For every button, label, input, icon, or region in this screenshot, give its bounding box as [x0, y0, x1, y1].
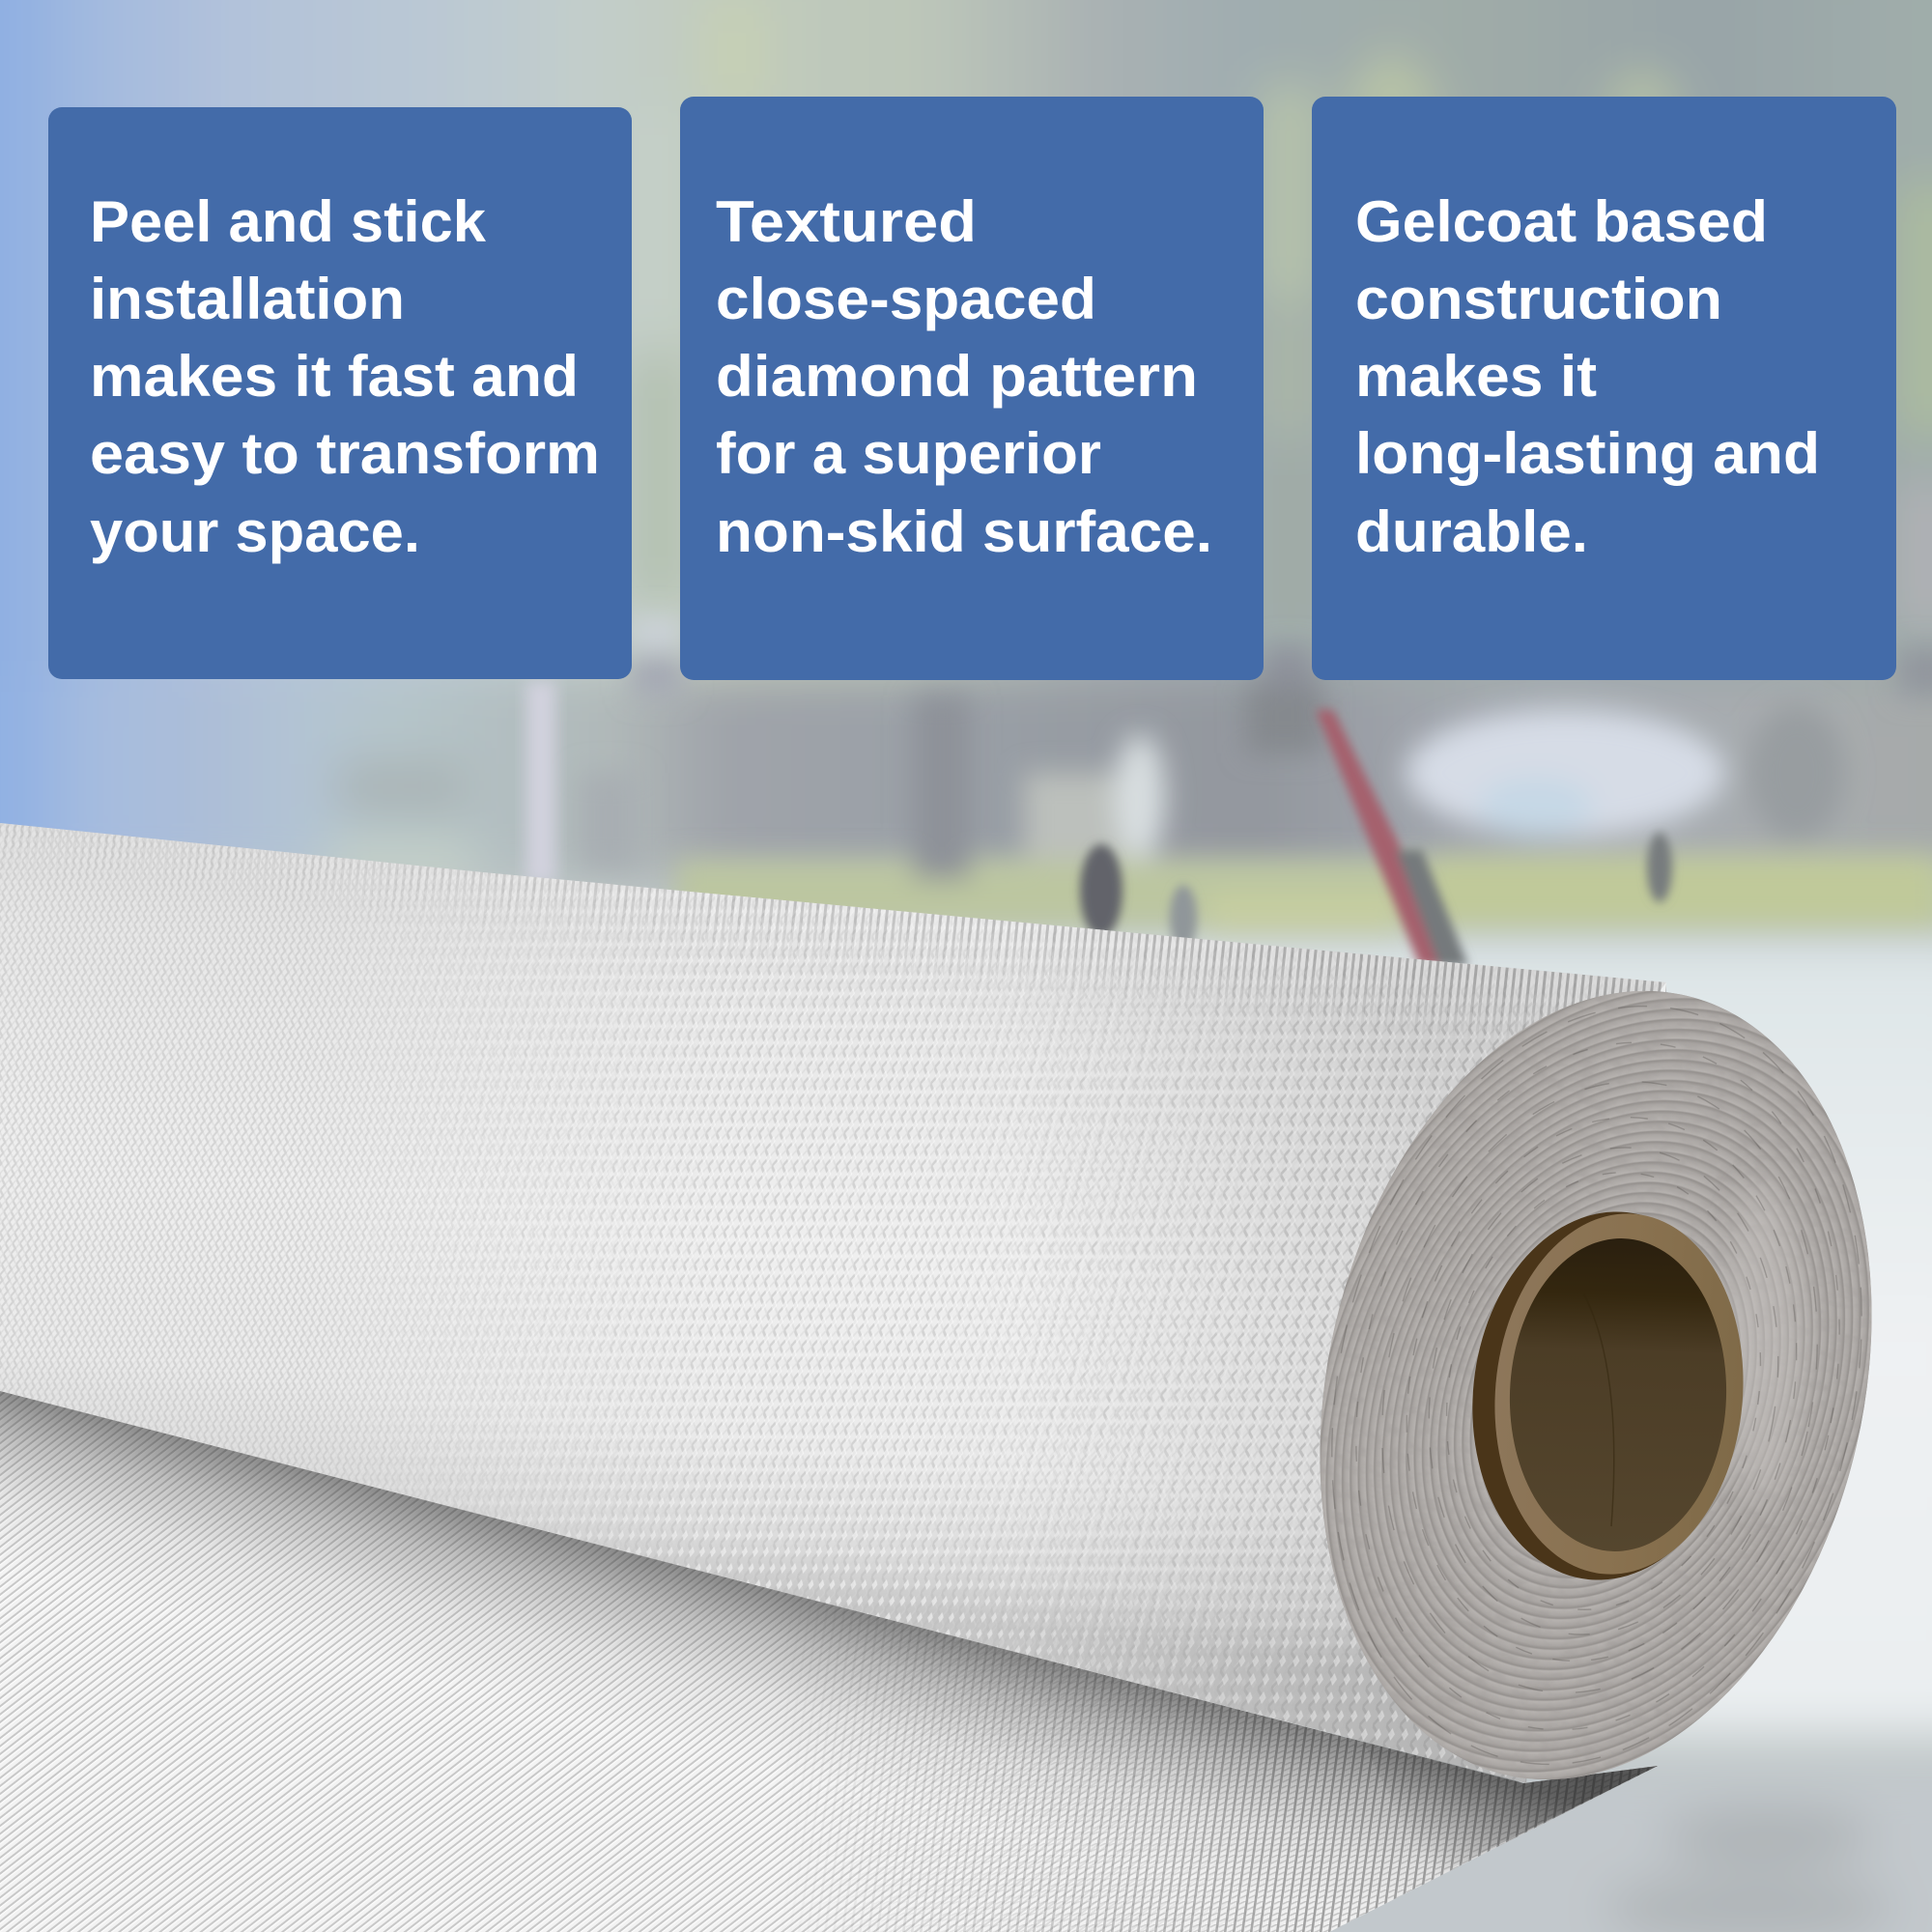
text: peel and stick description: installation	[90, 267, 405, 331]
text: textured pattern description: close-spaced	[716, 267, 1096, 331]
text: textured pattern description: diamond pattern	[716, 344, 1198, 409]
panel: textured diamond pattern	[680, 97, 1264, 680]
panel: gelcoat construction	[1312, 97, 1896, 680]
text: gelcoat description: long-lasting and	[1355, 421, 1820, 486]
text: textured pattern description: Textured	[716, 189, 977, 254]
text: textured pattern description: for a superior	[716, 421, 1101, 486]
lower unrolled sheet of non-skid material	[0, 1389, 1658, 1932]
text: gelcoat description: construction	[1355, 267, 1722, 331]
cardboard core tube	[1455, 1199, 1760, 1593]
text: gelcoat description: durable.	[1355, 499, 1588, 564]
text: gelcoat description: makes it	[1355, 344, 1597, 409]
panel: peel and stick	[48, 107, 632, 679]
text: textured pattern description: non-skid surface.	[716, 499, 1212, 564]
text: textured pattern description	[716, 189, 1212, 564]
text: peel and stick description: easy to transform	[90, 421, 600, 486]
text: peel and stick description: makes it fast and	[90, 344, 579, 409]
text: gelcoat description	[1355, 189, 1820, 564]
text: peel and stick description	[90, 189, 600, 564]
roll end face with wound layers	[1320, 991, 1872, 1779]
text: peel and stick description: Peel and stick	[90, 189, 487, 254]
roll body with diamond texture	[0, 823, 1666, 1783]
text: gelcoat description: Gelcoat based	[1355, 189, 1768, 254]
text: peel and stick description: your space.	[90, 499, 420, 564]
